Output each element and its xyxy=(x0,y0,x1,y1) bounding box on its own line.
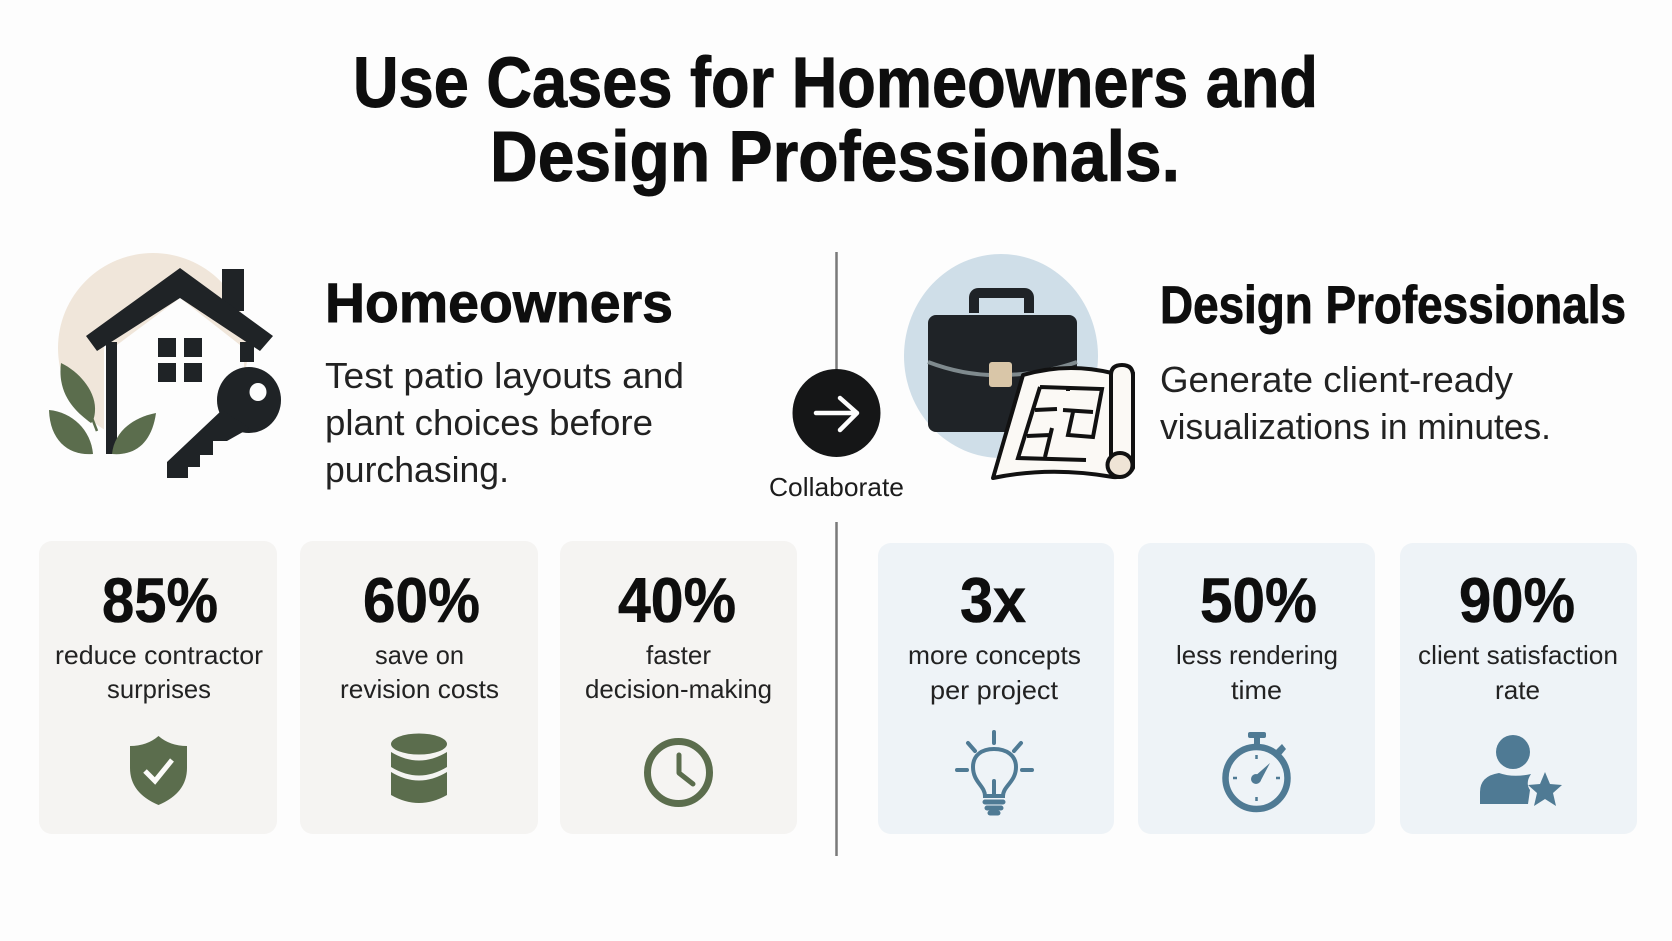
stat card: 85%: surprises xyxy=(107,674,211,704)
stat card: 50%: time xyxy=(1231,675,1282,705)
text: homeowners description xyxy=(325,355,684,490)
icon: light bulb xyxy=(957,732,1032,813)
icon: user with star xyxy=(1480,735,1562,806)
icon: briefcase with blueprint xyxy=(904,254,1133,478)
icon: house with key xyxy=(49,253,281,478)
text: design professionals description: visualizations in minutes. xyxy=(1160,406,1551,447)
stat card: 60%: save on xyxy=(375,640,464,670)
stat card: 90%: rate xyxy=(1495,675,1540,705)
stat card: 3x: more concepts xyxy=(908,640,1081,670)
stat card: 40%: decision-making xyxy=(585,674,772,704)
text: homeowners description: Test patio layouts and xyxy=(325,355,684,396)
stat card: 90%: client satisfaction xyxy=(1418,640,1618,670)
stat card: 3x: per project xyxy=(930,675,1059,705)
stat card: 50% xyxy=(1138,543,1375,834)
stat card: 90%: 90% xyxy=(1459,566,1575,636)
title: Design Professionals. xyxy=(490,118,1180,197)
icon: database xyxy=(391,734,447,803)
stat card: 85%: reduce contractor xyxy=(55,640,263,670)
text: design professionals description: Generate client-ready xyxy=(1160,359,1513,400)
stat card: 3x xyxy=(878,543,1114,834)
stat card: 90% xyxy=(1400,543,1637,834)
stat card: 60%: revision costs xyxy=(340,674,499,704)
stat card: 60%: 60% xyxy=(363,566,480,636)
icon: stopwatch xyxy=(1226,732,1288,809)
text: design professionals description xyxy=(1160,359,1551,447)
center divider xyxy=(835,252,838,856)
stat card: 60% xyxy=(300,541,538,834)
heading: homeowners: Homeowners xyxy=(325,271,673,334)
icon: collaborate arrow xyxy=(792,369,880,457)
stat card: 40%: faster xyxy=(646,640,711,670)
stat card: 50%: less rendering xyxy=(1176,640,1338,670)
stat card: 50%: 50% xyxy=(1200,566,1317,636)
stat card: 40%: 40% xyxy=(618,566,736,636)
text: homeowners description: purchasing. xyxy=(325,449,509,490)
stat card: 85% xyxy=(39,541,277,834)
text: homeowners description: plant choices before xyxy=(325,402,653,443)
title: Use Cases for Homeowners and xyxy=(353,44,1318,123)
stat card: 40% xyxy=(560,541,797,834)
icon: shield xyxy=(130,736,187,805)
stat card: 3x: 3x xyxy=(960,566,1026,636)
stat card: 85%: 85% xyxy=(102,566,218,636)
title xyxy=(353,44,1318,197)
label: collaborate: Collaborate xyxy=(769,472,904,502)
icon: clock xyxy=(648,742,710,804)
